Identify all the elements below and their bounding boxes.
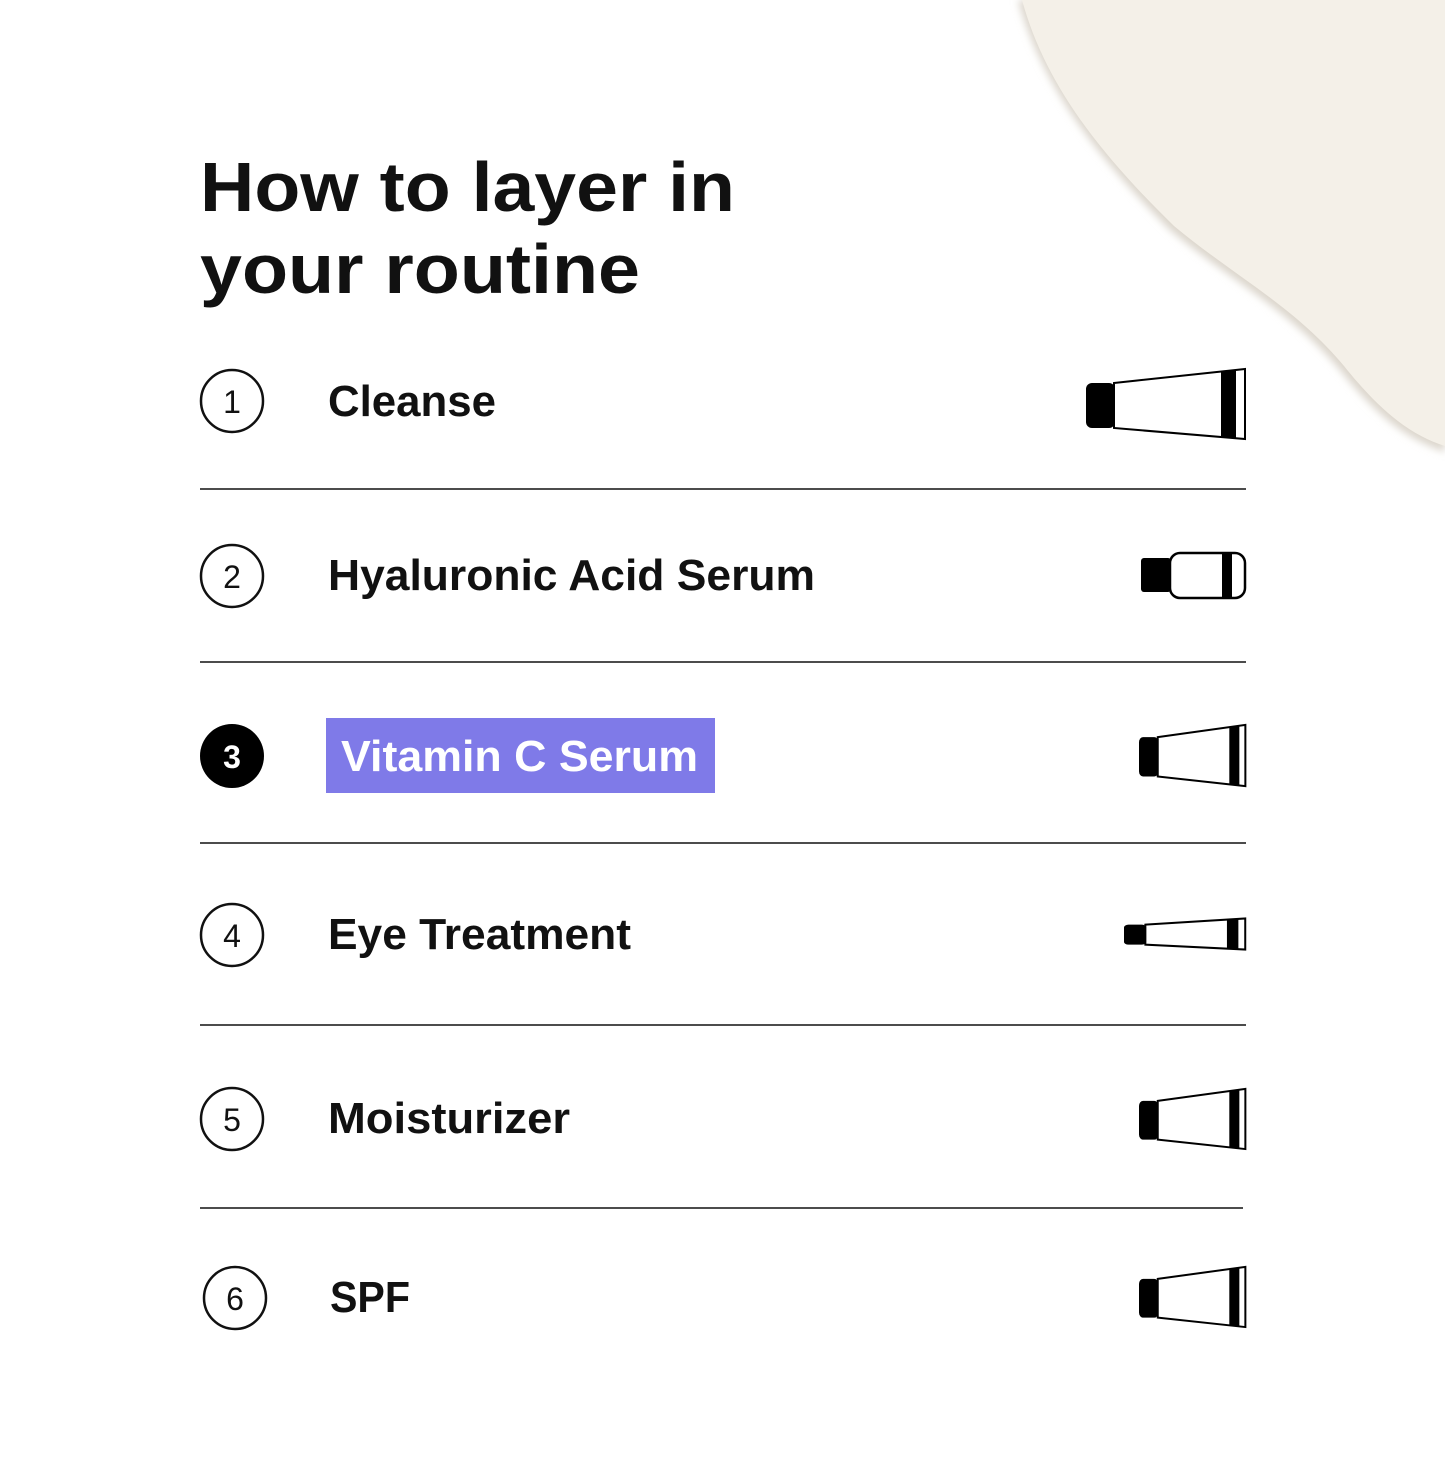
step 4: Eye Treatment: Eye Treatment: [328, 910, 631, 959]
step 3: Vitamin C Serum (highlighted): 3: [223, 739, 241, 775]
icon: tube: [1124, 918, 1245, 950]
step 1: Cleanse: Cleanse: [328, 377, 496, 426]
icon: tube: [1139, 1089, 1245, 1149]
step 6: SPF: 6: [226, 1281, 244, 1317]
step 4: Eye Treatment: [201, 904, 1245, 966]
step 5: Moisturizer: [201, 1088, 1245, 1150]
title: your routine: [200, 230, 640, 308]
step 3: Vitamin C Serum (highlighted): [200, 718, 1245, 793]
step 2: Hyaluronic Acid Serum: Hyaluronic Acid Serum: [328, 551, 815, 600]
step 1: Cleanse: 1: [223, 384, 241, 420]
step 6: SPF: [204, 1267, 1245, 1329]
icon: bottle: [1141, 553, 1245, 598]
dividers: [200, 489, 1246, 1208]
icon: tube: [1086, 369, 1245, 439]
step 3: Vitamin C Serum (highlighted): Vitamin C Serum: [341, 732, 698, 781]
title: [200, 148, 735, 308]
step 2: Hyaluronic Acid Serum: [201, 545, 1245, 607]
step 4: Eye Treatment: 4: [223, 918, 241, 954]
step 2: Hyaluronic Acid Serum: 2: [223, 559, 241, 595]
step 6: SPF: SPF: [330, 1273, 410, 1322]
icon: tube: [1139, 1267, 1245, 1327]
title: How to layer in: [200, 148, 735, 226]
icon: tube: [1139, 725, 1245, 786]
step 5: Moisturizer: 5: [223, 1102, 241, 1138]
step 1: Cleanse: [201, 369, 1245, 439]
step 5: Moisturizer: Moisturizer: [328, 1094, 570, 1143]
background: cream blob: [1018, 0, 1445, 452]
